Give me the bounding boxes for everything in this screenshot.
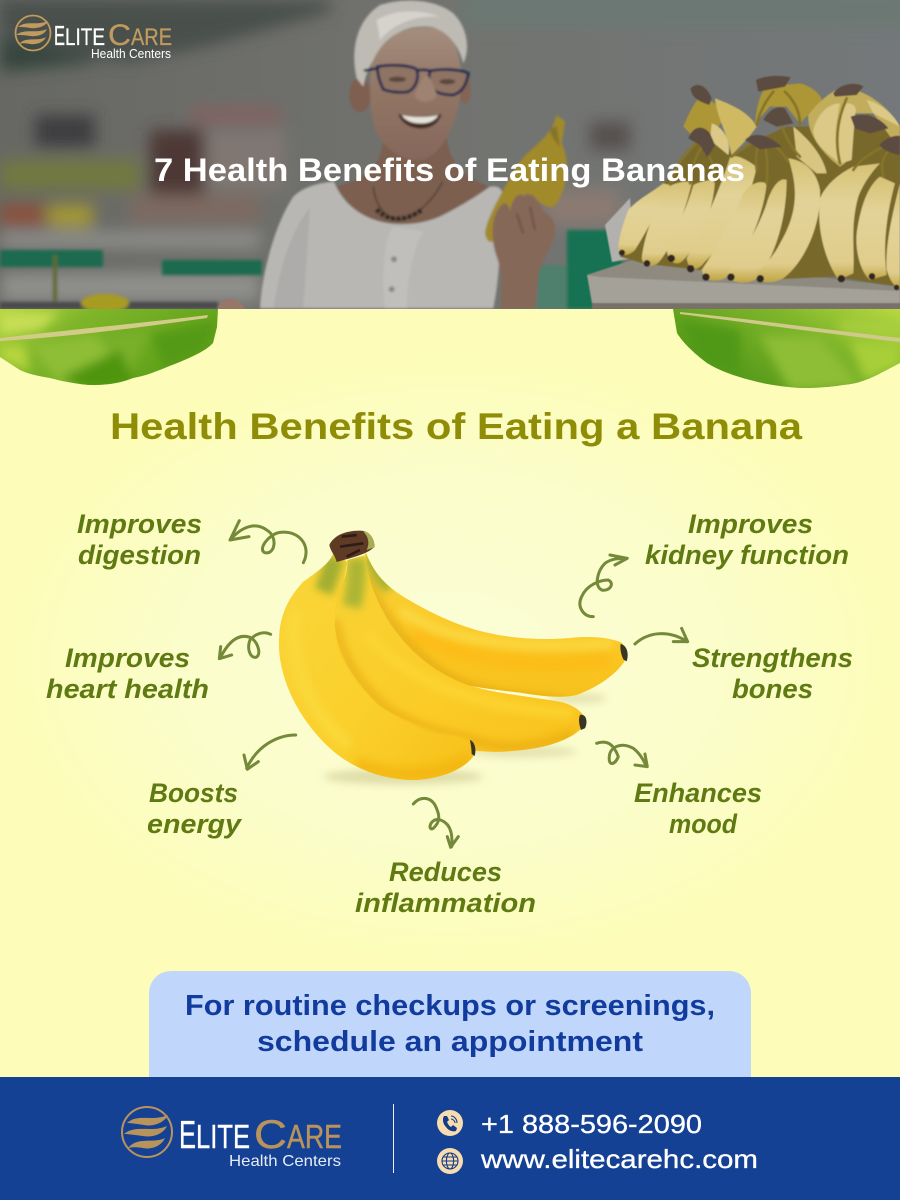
soft background glow (10, 360, 890, 960)
tips (619, 250, 899, 290)
hero photo: woman holding bananas at market (0, 0, 900, 312)
buttons (391, 256, 397, 262)
phone number: +1 888-596-2090 (481, 1109, 702, 1139)
arrow: energy (244, 735, 296, 769)
arrow: heart health (219, 633, 271, 659)
footer logo: LITE (196, 1118, 250, 1155)
label: boosts energy (147, 778, 243, 839)
banana leaf right (672, 309, 900, 390)
back banana (365, 552, 625, 697)
label: reduces inflammation: inflammation (355, 888, 536, 918)
footer logo: C (254, 1113, 287, 1157)
label: improves digestion: Improves (77, 509, 202, 539)
banana shadow (323, 769, 483, 785)
olive stems (670, 92, 893, 183)
callout text: For routine checkups or screenings, (185, 990, 715, 1022)
face (370, 27, 461, 160)
logo mark (16, 16, 50, 50)
label: reduces inflammation: Reduces (389, 857, 502, 887)
hand and arm (493, 195, 555, 308)
arrow: inflammation (413, 798, 458, 847)
label: enhances mood: mood (669, 809, 737, 839)
arrow: mood (597, 742, 647, 767)
banana bunch illustration (277, 531, 633, 785)
label: improves kidney function: kidney function (645, 540, 849, 570)
eyes (389, 77, 406, 82)
title: 7 Health Benefits of Eating Bananas (154, 152, 745, 188)
top logo: C (108, 19, 131, 52)
crown (329, 531, 375, 562)
back upper bunch (755, 83, 822, 123)
footer logo mark (122, 1107, 172, 1157)
label: strengthens bones: bones (732, 674, 813, 704)
arrows (219, 521, 688, 847)
label: improves heart health: Improves (65, 643, 190, 673)
front banana (277, 552, 477, 782)
glasses (377, 65, 418, 92)
label: boosts energy: energy (147, 809, 243, 839)
main heading: Health Benefits of Eating a Banana (110, 406, 802, 447)
top logo: LITE (65, 24, 105, 51)
woman (260, 0, 567, 308)
bananas on table (618, 76, 900, 290)
arrow: digestion (230, 521, 306, 563)
footer bar (0, 1077, 900, 1200)
footer logo (122, 1107, 342, 1170)
footer logo: ARE (287, 1118, 342, 1155)
label: improves heart health (46, 643, 209, 704)
label: improves heart health: heart health (46, 674, 209, 704)
label: strengthens bones (692, 643, 853, 704)
label: enhances mood: Enhances (634, 778, 762, 808)
necklace (373, 182, 443, 220)
top logo (16, 16, 172, 61)
nose (415, 75, 437, 102)
label: enhances mood (634, 778, 762, 839)
fingers (618, 156, 900, 288)
held banana (485, 115, 567, 242)
label: boosts energy: Boosts (149, 778, 238, 808)
table (587, 198, 900, 309)
label: improves kidney function (645, 509, 849, 570)
footer divider (393, 1104, 394, 1173)
middle banana (323, 553, 587, 753)
label: reduces inflammation (355, 857, 536, 918)
arrow: kidney (580, 555, 627, 617)
callout text: schedule an appointment (257, 1026, 643, 1058)
website: www.elitecarehc.com (480, 1144, 758, 1174)
footer logo wordmark: E (179, 1114, 196, 1157)
callout panel (149, 971, 751, 1078)
smile (398, 114, 442, 128)
ears (349, 78, 371, 112)
label: improves digestion: digestion (78, 540, 201, 570)
blouse (260, 182, 503, 308)
hair (354, 0, 467, 87)
dark base (620, 113, 900, 287)
label: improves kidney function: Improves (688, 509, 813, 539)
banana tips (470, 644, 628, 756)
small hand bottom left (217, 298, 245, 309)
arrow: bones (635, 628, 688, 644)
footer logo: Health Centers (229, 1153, 341, 1170)
top logo: Health Centers (91, 47, 171, 61)
logo wordmark: E (54, 20, 65, 51)
callout text (185, 990, 715, 1058)
icon: globe (437, 1148, 463, 1174)
crowns (688, 76, 900, 157)
banana leaf left (0, 309, 218, 390)
chest and neck (336, 138, 488, 224)
icon: phone (437, 1110, 463, 1136)
label: improves digestion (77, 509, 202, 570)
top logo: ARE (131, 24, 172, 51)
label: strengthens bones: Strengthens (692, 643, 853, 673)
